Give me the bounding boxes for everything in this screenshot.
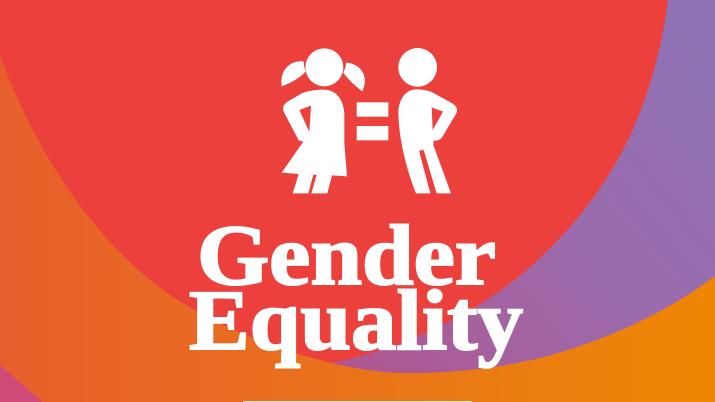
shape: magenta corner [0, 365, 42, 402]
icon: equals sign [357, 102, 388, 140]
icon: boy [398, 48, 457, 193]
title line: Gender: Gender [197, 207, 496, 303]
title line: Equality: Equality [189, 272, 523, 368]
icon: girl and boy with equals sign [281, 48, 457, 193]
icon: girl [281, 48, 365, 193]
bar: cropped white strip [243, 401, 472, 402]
title: Gender Equality [189, 207, 523, 368]
